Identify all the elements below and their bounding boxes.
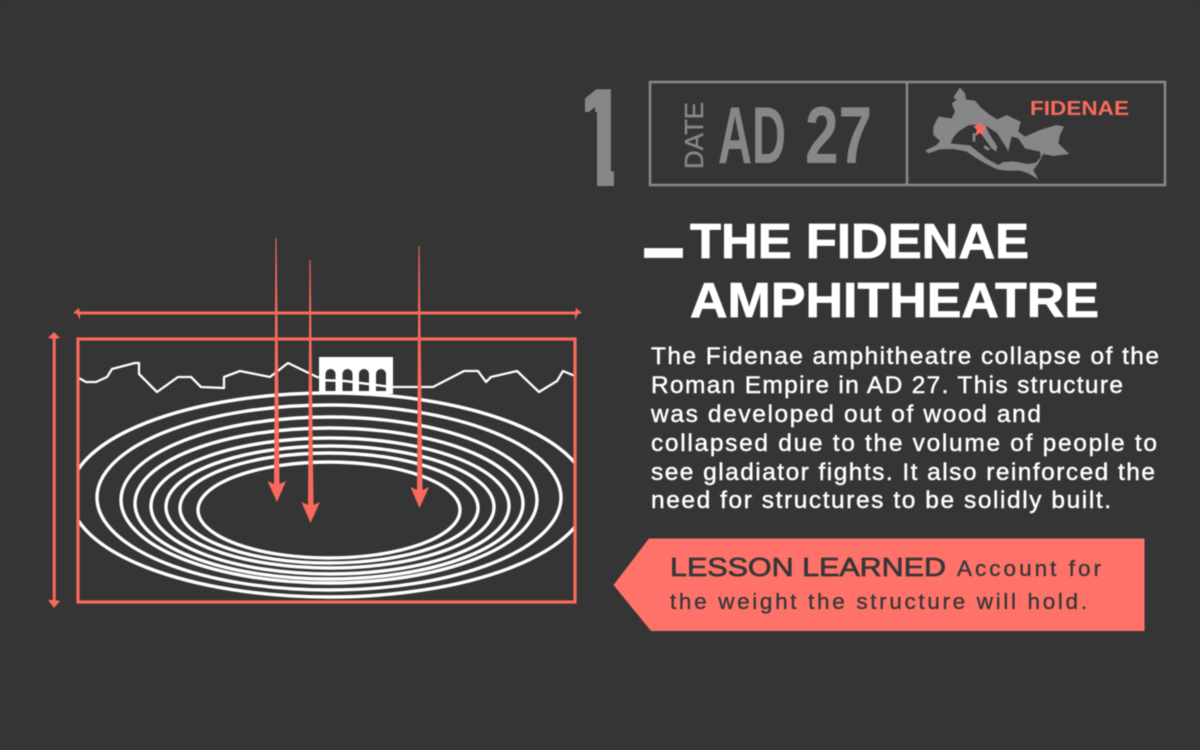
load arrow 1 — [268, 238, 286, 502]
skyline — [77, 363, 575, 392]
map of the Roman Empire — [925, 87, 1069, 179]
date value: AD — [718, 91, 786, 181]
location star — [973, 121, 987, 136]
body text: was developed out of wood and — [650, 401, 1041, 428]
callout text: the weight the structure will hold. — [670, 589, 1087, 614]
heading: AMPHITHEATRE — [690, 273, 1099, 328]
callout text — [670, 554, 1102, 614]
body text: see gladiator fights. It also reinforced the — [651, 459, 1155, 486]
load arrow 2 — [302, 260, 320, 523]
frame — [78, 339, 575, 602]
date value: 27 — [805, 91, 872, 181]
load arrow 3 — [410, 246, 429, 508]
number 1: 1 — [570, 59, 631, 216]
diagram: amphitheatre blueprint — [48, 238, 588, 608]
map label: FIDENAE — [1030, 98, 1129, 120]
date label: DATE — [679, 102, 709, 169]
height dimension line — [48, 332, 60, 608]
info box — [650, 82, 1165, 185]
callout: lesson learned — [614, 538, 1144, 631]
colosseum arcade building — [319, 357, 393, 394]
callout arrow shape — [614, 538, 1144, 631]
heading dash — [644, 248, 682, 258]
callout text: LESSON LEARNED — [670, 554, 946, 582]
width dimension line — [73, 308, 582, 320]
heading text: THE FIDENAE — [690, 215, 1029, 269]
callout text: Account for — [957, 556, 1102, 581]
body text: Roman Empire in AD 27. This structure — [651, 372, 1123, 399]
heading — [644, 215, 1099, 328]
body text: need for structures to be solidly built. — [651, 487, 1111, 514]
body text: collapsed due to the volume of people to — [651, 430, 1157, 457]
box outline — [650, 82, 1165, 185]
amphitheatre seating rings — [70, 393, 588, 597]
body text: The Fidenae amphitheatre collapse of the — [651, 343, 1159, 370]
body text — [650, 343, 1159, 514]
